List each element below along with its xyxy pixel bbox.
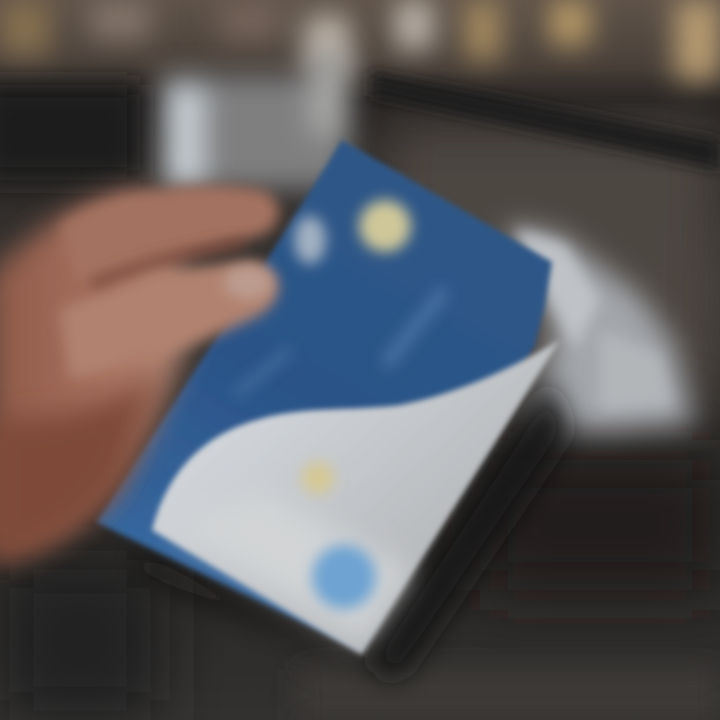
- hand: upper finger: [60, 185, 279, 285]
- card: light blue circle: [312, 545, 376, 609]
- card: white lower section: [152, 340, 560, 655]
- card: gold chip top: [359, 200, 411, 252]
- hand: lower finger: [60, 262, 278, 380]
- card: pale emblem: [294, 216, 326, 264]
- card: small gold mark: [302, 462, 334, 494]
- card: blue upper section: [96, 140, 552, 650]
- napkin: crumpled white paper: [505, 225, 695, 432]
- hand: shadow between fingers: [90, 243, 245, 285]
- background: glass: [160, 50, 350, 190]
- card: white edge shading: [170, 490, 410, 640]
- card: shadow: [130, 380, 570, 680]
- hand: palm: [0, 190, 195, 560]
- hand: fingernail: [224, 265, 272, 299]
- hand: fingers holding the card: [0, 185, 279, 560]
- hand: lower shadow: [0, 370, 160, 560]
- card: faint blue text marks: [385, 290, 445, 365]
- background: blurred warm lights: [0, 0, 720, 80]
- card: blue and white credit card: [96, 140, 560, 655]
